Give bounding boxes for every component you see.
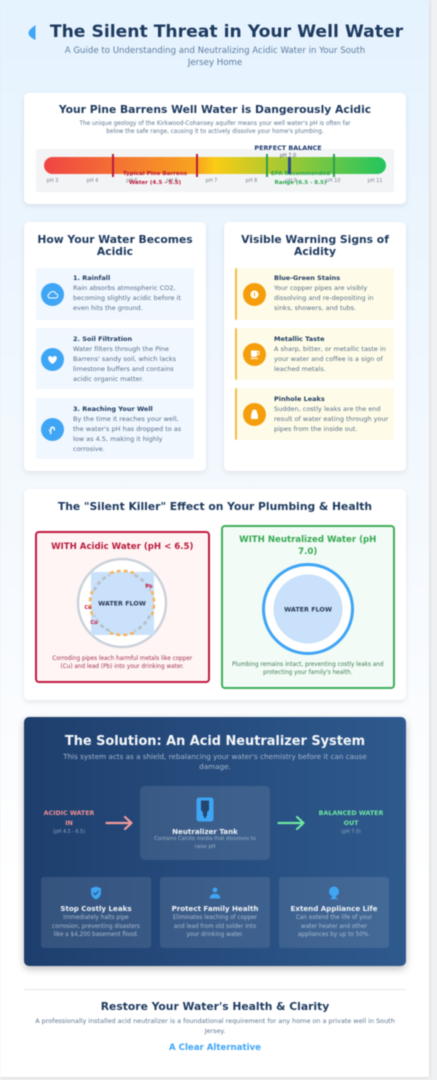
step 2 text: acidic organic matter.	[73, 375, 144, 383]
panel: solution	[24, 717, 406, 966]
step 1 text: 1. Rainfall	[73, 274, 110, 282]
benefit 2 text: Protect Family Health	[172, 904, 258, 913]
icon: leak	[242, 402, 266, 426]
footer heading: Restore Your Water's Health & Clarity	[101, 1000, 329, 1013]
footer text: Jersey.	[205, 1027, 225, 1035]
pH description: The unique geology of the Kirkwood-Cohansey aquifer means your well water's pH is often far	[80, 120, 350, 126]
chart: pH scale bar: pH 4	[87, 178, 98, 184]
panel: how water becomes acidic	[24, 222, 206, 471]
chart: pH scale bar: EPA Recommended	[271, 171, 330, 177]
warning 3 text: result of water eating through your	[274, 415, 388, 423]
warning 2 text: Metallic Taste	[274, 335, 325, 343]
acidic heading: WITH Acidic Water (pH < 6.5)	[51, 542, 193, 552]
benefit 2 text: your drinking water.	[186, 932, 244, 938]
step 3 text: By the time it reaches your well,	[73, 415, 179, 423]
acidic water in label: (pH 4.5 - 6.5)	[53, 830, 85, 835]
panel: warning signs	[224, 222, 406, 471]
icon: appliance	[328, 886, 340, 900]
chart: pH scale bar: pH 5	[126, 178, 138, 184]
benefit 1 text: corrosion, preventing disasters	[52, 924, 140, 930]
chart: pH scale bar: pH 7.0	[280, 153, 296, 159]
panel heading: silent killer: The "Silent Killer" Effect on Your Plumbing & Health	[58, 500, 372, 513]
acidic caption	[52, 654, 193, 670]
diagram: corroded pipe: WATER FLOW	[98, 600, 146, 608]
diagram: corroded pipe: Cu	[90, 620, 98, 626]
chart: pH scale bar: pH 8	[246, 178, 257, 184]
benefit 3 text: appliances by up to 50%.	[298, 932, 370, 938]
step 1 text: becoming slightly acidic before it	[73, 294, 181, 302]
acidic caption: (Cu) and lead (Pb) into your drinking water.	[61, 664, 184, 670]
step 3 text: low as 4.5, making it highly	[73, 435, 163, 443]
neutralized caption	[232, 660, 384, 676]
warning 1 text: sinks, showers, and tubs.	[274, 304, 356, 312]
step 2 text: Water filters through the Pine	[73, 345, 169, 353]
warning 1 text: dissolving and re-depositing in	[274, 294, 374, 302]
step 3: reaching your well	[36, 398, 194, 459]
warning 1: stains	[235, 268, 394, 320]
solution heading: The Solution: An Acid Neutralizer System	[65, 734, 365, 748]
benefit 3 text: water heater and other	[301, 924, 367, 930]
diagram: corroded pipe: Cu	[84, 605, 92, 611]
warning 3: leaks	[235, 388, 394, 440]
step 1 text: Rain absorbs atmospheric CO2,	[73, 284, 176, 292]
icon: stain drop	[242, 282, 266, 306]
chart: pH scale bar: pH 10	[326, 178, 340, 184]
pH description	[79, 119, 351, 136]
subtitle: Jersey Home	[188, 58, 242, 68]
step 3 text: 3. Reaching Your Well	[73, 405, 153, 413]
icon: person	[209, 887, 221, 900]
acidic water in label: ACIDIC WATER	[44, 810, 94, 817]
icon: coffee cup	[242, 342, 266, 366]
panel heading: how water becomes acidic: Acidic	[97, 245, 133, 258]
benefit 2 text: Eliminates leaching of copper	[173, 915, 257, 921]
panel heading: pH scale: Your Pine Barrens Well Water is Dangerously Acidic	[59, 103, 371, 116]
footer text: A professionally installed acid neutralizer is a foundational requirement for any home on a private well in South	[35, 1017, 395, 1025]
benefit 2 text: and lead from old solder into	[174, 924, 256, 930]
warning 1 text: Your copper pipes are visibly	[274, 284, 367, 292]
balanced water out label: OUT	[344, 820, 358, 827]
benefit: stop costly leaks	[41, 877, 151, 948]
footer text	[34, 1017, 395, 1035]
warning 3 text: pipes from the inside out.	[274, 425, 357, 433]
benefit 1 text: Stop Costly Leaks	[60, 904, 132, 913]
benefit 2 text	[172, 904, 259, 938]
step 2 text: Barrens' sandy soil, which lacks	[73, 355, 176, 363]
diagram: corroded pipe	[76, 557, 168, 649]
acidic water in label: IN	[65, 820, 73, 827]
neutralized heading: 7.0)	[298, 547, 317, 557]
neutralized heading: WITH Neutralized Water (pH	[239, 535, 376, 545]
tank description: raise pH	[195, 844, 215, 850]
step 1 text: even hits the ground.	[73, 304, 143, 312]
icon: heart	[41, 348, 64, 370]
panel heading: how water becomes acidic: How Your Water Becomes	[37, 233, 193, 246]
warning 1 text	[274, 274, 374, 312]
solution subtitle: This system acts as a shield, rebalancing your water's chemistry before it can cause	[63, 752, 367, 761]
tank description: Contains Calcite media that dissolves to	[154, 836, 256, 842]
panel: pH scale	[24, 93, 406, 204]
step 3 text	[72, 405, 182, 453]
step 3 text: corrosive.	[73, 445, 105, 453]
benefit 3 text: Can extend the life of your	[296, 915, 372, 921]
icon: cloud	[41, 282, 64, 306]
warning 2 text	[274, 335, 386, 373]
panel heading: how water becomes acidic	[37, 233, 193, 258]
warning 3 text	[274, 395, 389, 433]
chart: pH scale bar: PERFECT BALANCE	[254, 144, 322, 152]
chart: pH scale bar: Range (6.5 - 8.5)	[274, 180, 327, 186]
footer link: A Clear Alternative	[169, 1043, 261, 1053]
icon: tank	[196, 796, 214, 822]
benefit 1 text: like a $4,200 basement flood.	[54, 932, 138, 938]
warning 2: taste	[235, 328, 394, 380]
icon: shield	[90, 886, 102, 900]
step 3 text: the water's pH has dropped to as	[73, 425, 181, 433]
chart: pH scale bar: Typical Pine Barrens	[123, 171, 187, 177]
arrow: water out	[276, 815, 306, 831]
warning 3 text: Pinhole Leaks	[274, 395, 325, 403]
benefit 3 text: Extend Appliance Life	[291, 904, 377, 913]
neutralizer tank box	[140, 786, 270, 860]
panel: silent killer effect	[24, 489, 406, 700]
tank label: Neutralizer Tank	[172, 827, 238, 836]
benefit: extend appliance life	[279, 877, 389, 948]
step 2 text: limestone buffers and contains	[73, 365, 174, 373]
acidic water in label	[43, 810, 95, 835]
chart: pH scale bar: pH 9	[285, 178, 297, 184]
chart: pH scale bar: pH 6	[166, 178, 178, 184]
pH description: below the safe range, causing it to actively dissolve your home's plumbing.	[106, 129, 324, 135]
panel heading: warning signs: Visible Warning Signs of	[241, 233, 389, 246]
subtitle	[64, 46, 366, 68]
balanced water out label: (pH 7.0)	[341, 830, 361, 835]
warning 3 text: Sudden, costly leaks are the end	[274, 405, 381, 413]
benefit 1 text: Immediately halts pipe	[63, 915, 129, 921]
neutralized heading	[238, 534, 376, 557]
step 2: soil filtration	[36, 328, 194, 389]
tank description	[154, 836, 256, 850]
title: The Silent Threat in Your Well Water	[50, 22, 403, 42]
step 2 text: 2. Soil Filtration	[73, 335, 132, 343]
step 2 text	[72, 335, 176, 384]
diagram: healthy pipe: WATER FLOW	[284, 606, 332, 614]
panel heading: warning signs	[240, 233, 390, 258]
icon: water drop	[28, 24, 36, 40]
solution subtitle: damage.	[199, 762, 231, 771]
chart: pH scale bar: pH 3	[47, 178, 58, 184]
diagram: healthy pipe	[261, 562, 355, 656]
warning 2 text: your water and coffee is a sign of	[274, 355, 383, 363]
step 1 text	[72, 274, 182, 312]
warning 2 text: leached metals.	[274, 365, 326, 373]
solution subtitle	[62, 752, 367, 772]
warning 1 text: Blue-Green Stains	[274, 274, 340, 282]
chart: pH scale bar: pH 7	[206, 178, 217, 184]
chart: pH scale bar: pH 11	[368, 178, 382, 184]
balanced water out label: BALANCED WATER	[319, 810, 383, 817]
warning 2 text: A sharp, bitter, or metallic taste in	[274, 345, 386, 353]
chart: pH scale bar: Water (4.5 - 5.5)	[129, 180, 181, 186]
neutralized caption: protecting your family's health.	[263, 670, 352, 676]
icon: faucet	[41, 418, 64, 440]
arrow: water in	[104, 815, 134, 831]
subtitle: A Guide to Understanding and Neutralizing Acidic Water in Your South	[65, 46, 365, 56]
acidic caption: Corroding pipes leach harmful metals like copper	[52, 656, 192, 662]
benefit 1 text	[52, 904, 140, 938]
chart: pH scale bar	[36, 144, 394, 192]
panel: neutralized water comparison	[221, 525, 394, 688]
panel: acidic water comparison	[35, 531, 210, 683]
balanced water out label	[318, 810, 384, 835]
neutralized caption: Plumbing remains intact, preventing costly leaks and	[232, 662, 383, 668]
diagram: corroded pipe: Pb	[145, 584, 153, 590]
step 1: rainfall	[36, 268, 194, 320]
panel heading: warning signs: Acidity	[294, 245, 336, 258]
benefit: protect family health	[160, 877, 270, 948]
benefit 3 text	[290, 904, 378, 938]
